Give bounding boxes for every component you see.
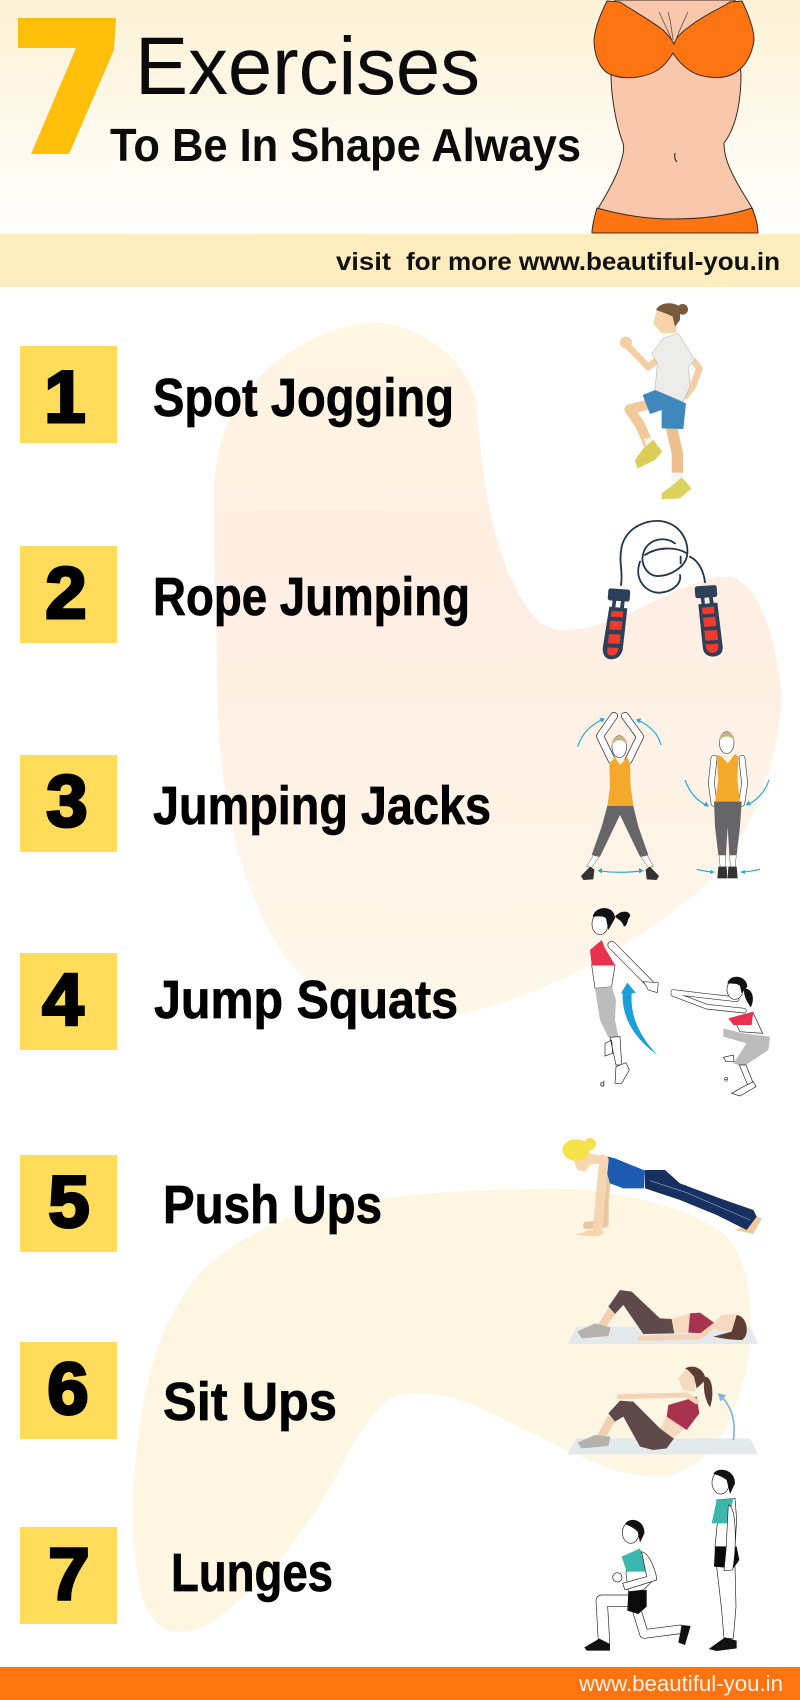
item 1: number badge: 1 [44,356,86,438]
item 1: number badge [20,346,117,443]
icon: jumping jacks figures [578,716,769,880]
banner: visit for more: for more www.beautiful-you.in [406,248,780,276]
item 6: label: Sit Ups [163,1372,337,1432]
icon: jump squat figures: e [724,1075,729,1084]
item 5: number badge: 5 [48,1161,90,1243]
icon: push up figure [562,1138,762,1237]
icon: torso in orange bikini [592,0,758,233]
item 2: number badge [20,546,117,643]
icon: skipping rope [603,521,723,659]
item 6: number badge: 6 [47,1348,89,1430]
item 4: number badge [20,953,117,1050]
footer bar: www.beautiful-you.in [578,1671,783,1696]
icon: jump squat figures: d [600,1079,605,1089]
title: big numeral 7 [18,18,116,154]
item 7: label: Lunges [171,1543,333,1603]
icon: spot jogging figure [620,303,699,499]
item 2: number badge: 2 [45,552,87,634]
item 3: number badge [20,755,117,852]
item 5: number badge [20,1155,117,1252]
item 5: label: Push Ups [163,1175,382,1235]
item 3: label: Jumping Jacks [153,776,491,836]
subtitle: To Be In Shape Always [110,119,581,171]
title: Exercises: Exercises [135,21,480,112]
item 4: label: Jump Squats [154,970,458,1030]
item 1: label: Spot Jogging [153,368,454,428]
item 3: number badge: 3 [46,760,88,842]
item 4: number badge: 4 [42,959,84,1041]
item 2: label: Rope Jumping [153,567,470,627]
background blob: lower [133,1189,751,1632]
item 7: number badge: 7 [48,1533,90,1615]
header background [0,0,800,234]
icon: lunge figures [584,1470,739,1651]
icon: sit up figures [567,1290,758,1454]
background blob: upper [214,323,781,1017]
banner: visit for more [0,234,800,287]
icon: jump squat figures [590,908,770,1096]
banner: visit for more: visit [336,248,392,276]
footer bar [0,1667,800,1700]
item 7: number badge [20,1527,117,1624]
item 6: number badge [20,1342,117,1439]
